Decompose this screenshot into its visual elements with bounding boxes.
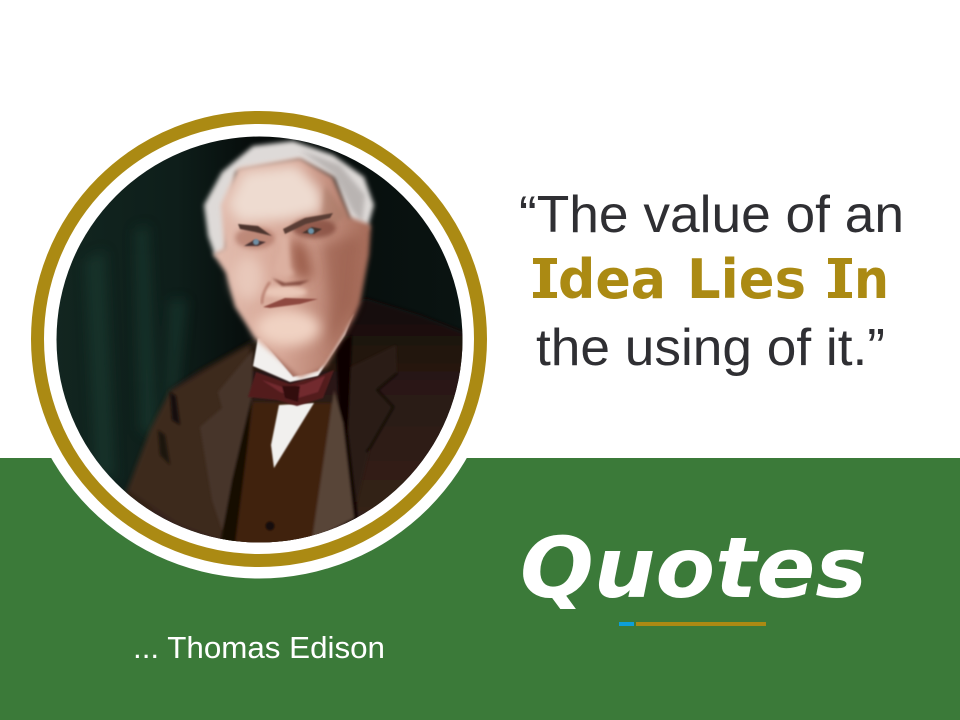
upper lip highlight xyxy=(263,286,307,298)
highlighted line xyxy=(533,248,889,311)
mouth xyxy=(263,298,318,308)
highlighted line: dea xyxy=(558,248,666,311)
green footer band xyxy=(0,458,960,720)
right coat lapel xyxy=(346,347,397,505)
coat xyxy=(124,300,462,542)
neck and collar xyxy=(253,313,354,382)
left eye socket shade xyxy=(235,227,275,249)
nasolabial crease xyxy=(262,282,270,304)
line three with closing quote: the using of it.” xyxy=(536,319,885,377)
nose lit side xyxy=(280,237,294,276)
right eyebrow xyxy=(283,213,333,234)
highlighted line: I xyxy=(830,248,850,311)
portrait medallion xyxy=(20,100,498,578)
highlighted line: n xyxy=(854,248,889,311)
highlighted line: I xyxy=(535,248,555,311)
forehead highlight xyxy=(228,165,322,222)
grey brown waistcoat panel xyxy=(312,390,354,540)
hair shade xyxy=(300,150,365,222)
section title: Quotes xyxy=(520,519,867,617)
title underline xyxy=(619,622,766,626)
left coat sleeve xyxy=(126,340,252,507)
left cheek highlight xyxy=(233,256,263,300)
face xyxy=(213,158,371,378)
white hair xyxy=(204,141,374,256)
forehead shade xyxy=(320,188,342,222)
chin highlight xyxy=(256,310,320,346)
under nose xyxy=(272,278,310,286)
attribution: ... Thomas Edison xyxy=(133,631,385,665)
quote text xyxy=(519,186,904,377)
line one with opening quote: “The value of an xyxy=(519,186,904,244)
waistcoat xyxy=(235,402,332,545)
waistcoat button xyxy=(266,522,274,530)
right cheek shadow xyxy=(322,235,360,350)
bow tie xyxy=(248,370,334,406)
right eye socket shade xyxy=(292,218,336,238)
left eyebrow xyxy=(238,224,272,236)
left lapel xyxy=(200,350,253,530)
gold ring xyxy=(38,118,480,560)
shirt front xyxy=(271,403,314,468)
nose shadow xyxy=(290,234,313,282)
right eye xyxy=(302,227,322,234)
white outer ring xyxy=(20,100,498,578)
highlighted line: Lies xyxy=(687,248,806,311)
left eye xyxy=(244,240,266,246)
portrait photo of Thomas Edison xyxy=(50,130,470,560)
